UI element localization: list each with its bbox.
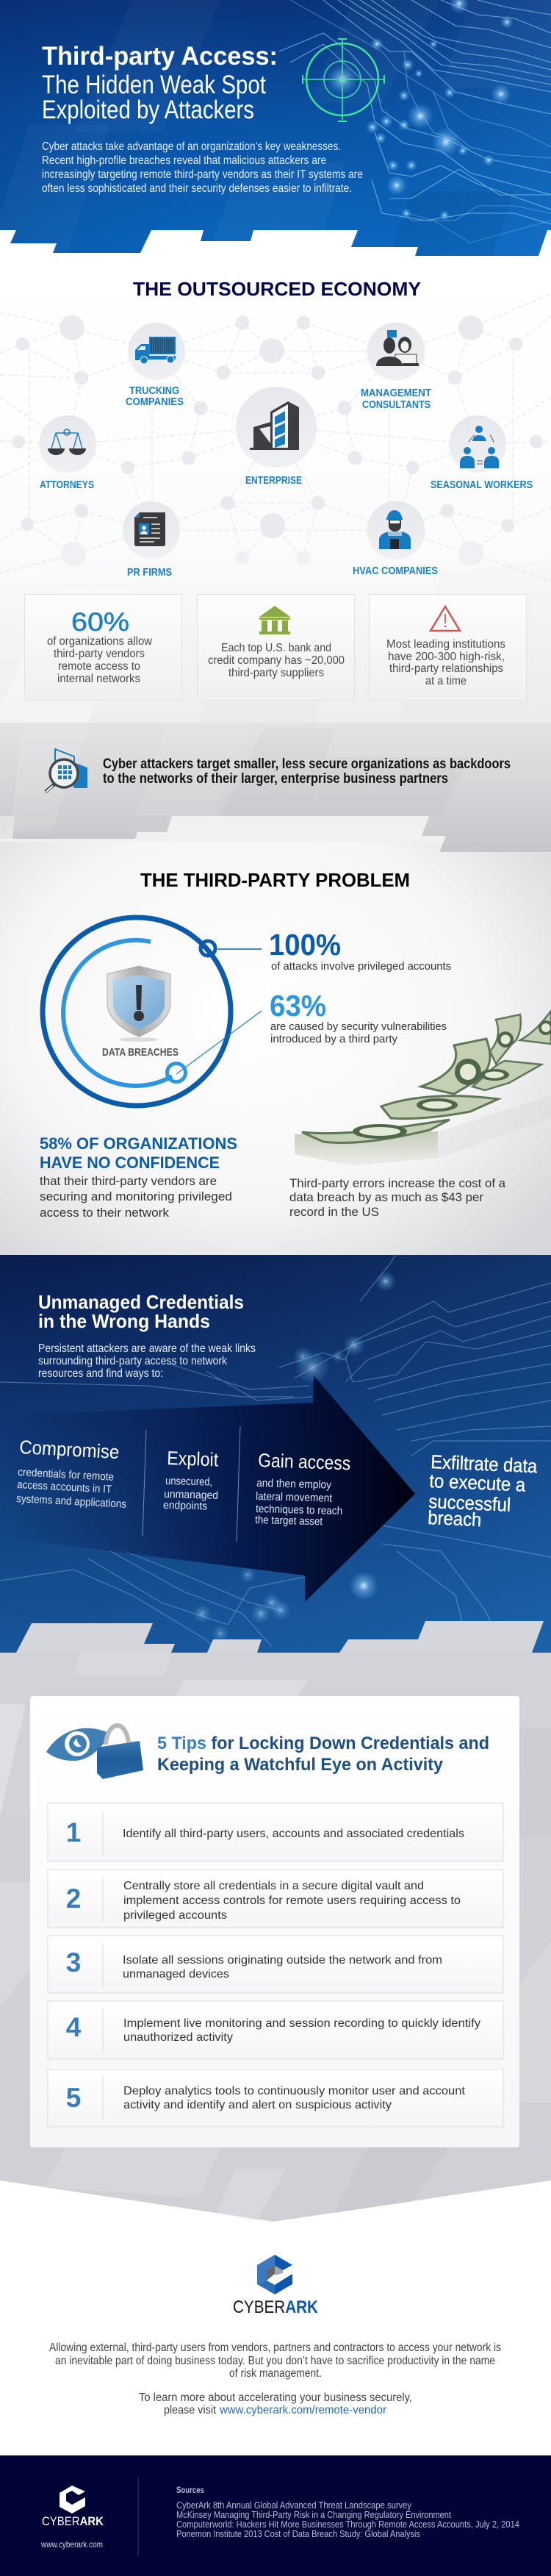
footer panel — [0, 2455, 551, 2576]
tip 4: 4 — [66, 2012, 82, 2042]
stat: 63%: 63% — [270, 989, 326, 1023]
cyberark logo: CYBERARK — [233, 2297, 319, 2317]
tip 2 — [48, 1870, 503, 1928]
hero intro paragraph: often less sophisticated and their security defenses easier to infiltrate. — [42, 182, 352, 195]
icon: green target crosshair — [303, 39, 384, 121]
intro text: persistent attackers: surrounding third-party access to network — [38, 1355, 228, 1367]
sources: Sources — [176, 2485, 204, 2495]
call to action with url: please visit — [164, 2404, 217, 2416]
stat: 58% no confidence: that their third-party vendors are — [40, 1174, 217, 1188]
stat card: high-risk relationships: have 200-300 high-risk, — [388, 651, 505, 663]
step: compromise: systems and applications — [16, 1492, 126, 1511]
tip 5 — [48, 2069, 503, 2127]
step: gain access — [255, 1449, 351, 1528]
stat card: 60%: third-party vendors — [54, 648, 145, 660]
tip 1: 1 — [66, 1817, 81, 1847]
heading: five tips — [157, 1734, 489, 1775]
heading: unmanaged credentials — [38, 1291, 244, 1332]
heading: five tips: 5 Tips for Locking Down Credentials and — [157, 1734, 489, 1753]
icon: trucking companies — [128, 323, 185, 380]
icon: seasonal workers — [449, 415, 506, 473]
hero circuit nodes — [366, 0, 514, 221]
step: exploit — [163, 1447, 219, 1513]
stat: 58% no confidence: HAVE NO CONFIDENCE — [40, 1153, 220, 1172]
step: exploit: unsecured, — [165, 1475, 212, 1489]
stat: 100% — [269, 928, 451, 973]
icon: pr firms document — [123, 501, 180, 559]
icon: management consultants — [367, 322, 425, 381]
label: hvac companies: HVAC COMPANIES — [353, 565, 438, 577]
tip 2: 2 — [66, 1883, 81, 1914]
text: cost of a data breach: data breach by as much as $43 per — [289, 1190, 483, 1204]
intro text: persistent attackers: Persistent attackers are aware of the weak links — [38, 1342, 256, 1355]
heading: five tips: Keeping a Watchful Eye on Activity — [157, 1755, 444, 1775]
icon: warning triangle — [431, 607, 460, 631]
hero white stepped edge — [0, 230, 551, 265]
label: attorneys: ATTORNEYS — [40, 479, 94, 491]
label: management consultants — [361, 387, 431, 411]
hero intro paragraph: Cyber attacks take advantage of an organization’s key weaknesses. — [42, 140, 341, 153]
step: gain access: and then employ — [256, 1477, 332, 1492]
stat card: high-risk relationships: at a time — [425, 675, 467, 687]
icon: eye and padlock — [46, 1725, 143, 1779]
step: gain access: lateral movement — [256, 1490, 333, 1505]
step: exploit: unmanaged — [164, 1488, 218, 1502]
illustration: flying money — [295, 1011, 551, 1166]
step: exploit: Exploit — [167, 1447, 219, 1470]
tip 1: Identify all third-party users, accounts and associated credentials — [123, 1828, 464, 1840]
icon: bank — [259, 606, 290, 634]
tip 2: privileged accounts — [123, 1909, 227, 1922]
title: Exploited by Attackers — [42, 96, 254, 124]
tip 2: Centrally store all credentials in a secure digital vault and — [123, 1880, 424, 1892]
stat: 58% no confidence: 58% OF ORGANIZATIONS — [40, 1134, 237, 1153]
label: trucking companies: TRUCKING — [129, 384, 179, 397]
unmanaged credentials background — [0, 1255, 551, 1667]
label: trucking companies — [126, 384, 184, 408]
stat card: bank suppliers: Each top U.S. bank and — [221, 642, 331, 654]
stat card: 60%: 60% — [71, 608, 129, 637]
step: gain access: the target asset — [255, 1514, 323, 1528]
stat card: 60% — [25, 594, 182, 700]
text: cost of a data breach — [289, 1176, 506, 1219]
stat card: 60%: internal networks — [57, 673, 140, 685]
closing paragraph — [49, 2341, 501, 2380]
sources: CyberArk 8th Annual Global Advanced Threat Landscape survey — [176, 2500, 411, 2511]
icon: warning shield — [107, 966, 170, 1042]
step: compromise: credentials for remote — [18, 1466, 115, 1484]
tip 4: Implement live monitoring and session recording to quickly identify — [123, 2017, 480, 2030]
stat: 63%: introduced by a third party — [270, 1033, 397, 1045]
stat card: 60%: of organizations allow — [47, 635, 153, 648]
grey band background — [0, 723, 551, 860]
step: exfiltrate data — [428, 1450, 538, 1531]
step: exfiltrate data: to execute a — [429, 1470, 526, 1496]
cyberark logo — [233, 2255, 319, 2317]
sources: Ponemon Institute 2013 Cost of Data Breach Study: Global Analysis — [176, 2528, 420, 2539]
stat card: high-risk relationships: third-party relationships — [389, 662, 503, 675]
arrow: attack path — [0, 1375, 415, 1602]
call to action with url — [139, 2391, 412, 2416]
callout: cyber attackers target smaller organizations: to the networks of their larger, enterprise business partners — [103, 771, 448, 787]
tips section background — [0, 1621, 551, 2222]
text: cost of a data breach: record in the US — [289, 1205, 379, 1219]
step: exfiltrate data: successful — [428, 1490, 511, 1516]
stat: 100%: 100% — [269, 928, 341, 962]
step: gain access: Gain access — [258, 1449, 351, 1474]
stat: 100%: of attacks involve privileged accounts — [271, 960, 451, 973]
closing paragraph: of risk management. — [229, 2367, 322, 2380]
label: enterprise: ENTERPRISE — [245, 474, 302, 487]
icon: hvac worker — [367, 501, 425, 559]
step: exfiltrate data: Exfiltrate data — [431, 1450, 538, 1477]
stat: 58% no confidence — [40, 1134, 237, 1220]
tip 1 — [48, 1803, 503, 1861]
title: Third-party Access: — [42, 42, 278, 71]
step: exploit: endpoints — [163, 1499, 207, 1513]
heading: the third-party problem: THE THIRD-PARTY PROBLEM — [140, 869, 410, 891]
stat card: high-risk relationships: Most leading institutions — [386, 638, 505, 651]
hero background — [0, 0, 551, 257]
callout: cyber attackers target smaller organizations — [103, 756, 511, 787]
divider — [143, 1426, 240, 1542]
stat card: bank suppliers: third-party suppliers — [228, 667, 324, 679]
stat: 58% no confidence: securing and monitoring privileged — [40, 1189, 232, 1203]
circuit lines backdrop — [0, 1253, 551, 1654]
tip 2: implement access controls for remote users requiring access to — [123, 1895, 461, 1907]
label: seasonal workers: SEASONAL WORKERS — [431, 479, 533, 491]
title — [42, 42, 278, 124]
hero intro paragraph — [42, 140, 363, 195]
closing paragraph: Allowing external, third-party users from vendors, partners and contractors to access your network is — [49, 2341, 501, 2354]
intro text: persistent attackers — [38, 1342, 256, 1380]
stat: 63%: are caused by security vulnerabilities — [270, 1020, 447, 1033]
icon: enterprise building — [236, 387, 317, 468]
panel: five tips card — [30, 1696, 519, 2147]
call to action with url: www.cyberark.com/remote-vendor — [219, 2404, 386, 2416]
stat card: bank suppliers — [197, 594, 354, 700]
data breaches ring diagram — [43, 917, 262, 1106]
title: The Hidden Weak Spot — [42, 71, 266, 99]
tip 3 — [48, 1936, 503, 1993]
label: management consultants: MANAGEMENT — [361, 387, 431, 399]
tip 3: 3 — [66, 1947, 81, 1978]
label: management consultants: CONSULTANTS — [362, 398, 431, 411]
hero intro paragraph: Recent high-profile breaches reveal that malicious attackers are — [42, 154, 326, 167]
stat card: bank suppliers: credit company has ~20,000 — [208, 654, 345, 667]
stat card: 60%: remote access to — [58, 660, 140, 673]
text: cost of a data breach: Third-party errors increase the cost of a — [289, 1176, 506, 1190]
label: trucking companies: COMPANIES — [126, 396, 184, 408]
icon: magnifier over buildings — [46, 749, 87, 792]
heading: unmanaged credentials: Unmanaged Credentials — [38, 1291, 244, 1313]
stat: 63% — [270, 989, 447, 1045]
heading: the outsourced economy: THE OUTSOURCED ECONOMY — [133, 278, 421, 300]
circuit glow nodes — [192, 1271, 396, 1642]
stat card: high-risk relationships — [369, 594, 526, 700]
step: gain access: techniques to reach — [256, 1503, 342, 1517]
step: compromise — [16, 1436, 126, 1511]
sources — [176, 2485, 519, 2539]
tip 3: unmanaged devices — [123, 1968, 229, 1981]
hero circuit board graphic — [279, 0, 551, 243]
outsourced economy background — [0, 265, 551, 816]
intro text: persistent attackers: resources and find ways to: — [38, 1367, 163, 1380]
label: data breaches: DATA BREACHES — [102, 1046, 179, 1059]
footer logo: CYBERARK — [42, 2514, 104, 2528]
icon: attorneys scales — [39, 415, 96, 473]
network diagram — [0, 294, 551, 581]
tip 5: 5 — [66, 2083, 81, 2113]
step: compromise: access accounts in IT — [17, 1478, 112, 1496]
footer logo: www.cyberark.com — [40, 2539, 103, 2550]
step: compromise: Compromise — [19, 1436, 120, 1463]
tip 3: Isolate all sessions originating outside the network and from — [123, 1954, 442, 1967]
stat: 58% no confidence: access to their network — [40, 1206, 169, 1220]
tip 5: Deploy analytics tools to continuously monitor user and account — [123, 2085, 466, 2097]
sources: McKinsey Managing Third-Party Risk in a Changing Regulatory Environment — [176, 2509, 451, 2520]
heading: unmanaged credentials: in the Wrong Hands — [38, 1310, 210, 1332]
footer logo — [40, 2486, 104, 2550]
tip 4: unauthorized activity — [123, 2031, 233, 2044]
closing paragraph: an inevitable part of doing business today. But you don’t have to sacrifice productivity in the name — [55, 2355, 495, 2367]
tip 4 — [48, 2001, 503, 2059]
label: pr firms: PR FIRMS — [127, 566, 172, 579]
call to action with url: To learn more about accelerating your business securely, — [139, 2391, 412, 2404]
third-party problem background — [0, 816, 551, 1255]
step: exfiltrate data: breach — [428, 1506, 482, 1531]
tip 5: activity and identify and alert on suspicious activity — [123, 2099, 392, 2111]
hero intro paragraph: increasingly targeting remote third-party vendors as their IT systems are — [42, 168, 363, 181]
